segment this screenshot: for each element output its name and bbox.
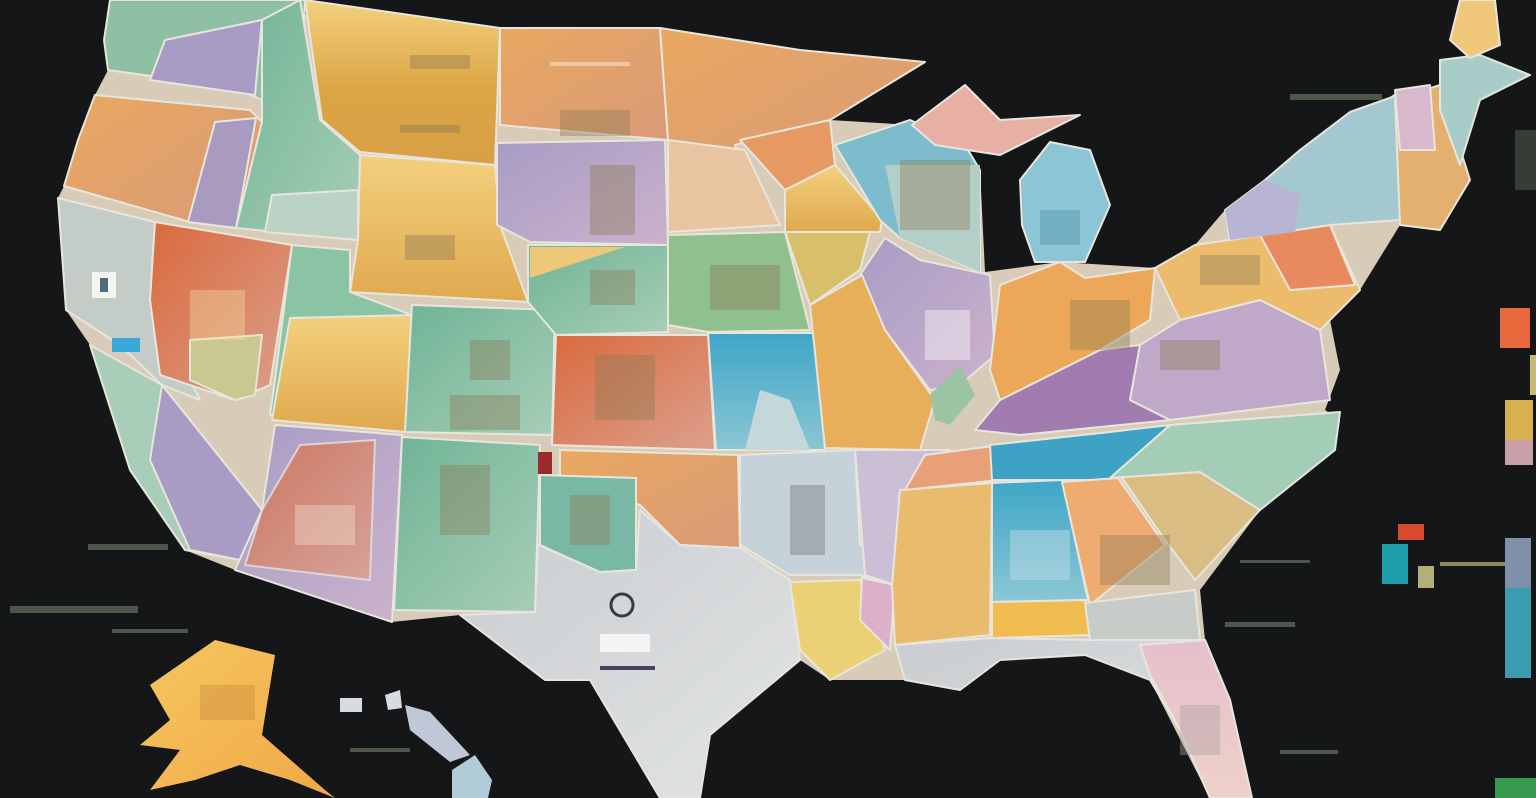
panel: alaska and hawaii xyxy=(140,640,492,798)
panel: midwest and south states xyxy=(740,120,1360,798)
legend: right edge swatches xyxy=(1382,308,1536,798)
icon: Texas marker xyxy=(600,594,655,670)
panel: michigan and northeast xyxy=(912,0,1530,262)
text placeholder bars in states xyxy=(190,55,1260,755)
icon: red marker xyxy=(538,452,552,474)
panel: western states xyxy=(58,0,555,622)
icon: california marker xyxy=(92,272,140,352)
panel: plains states xyxy=(460,28,925,798)
